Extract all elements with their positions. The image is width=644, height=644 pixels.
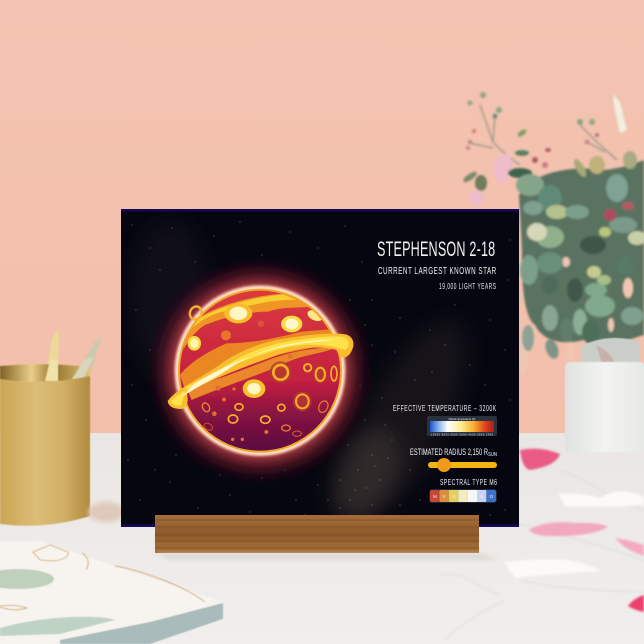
white flower [612, 93, 627, 133]
lower orange band [187, 347, 337, 400]
background: marble table [0, 433, 644, 644]
star illustration [145, 256, 375, 486]
pen gold [45, 329, 59, 381]
poster edge tint [121, 209, 519, 527]
star glow [145, 256, 375, 486]
craters [201, 364, 337, 436]
panel: star poster [121, 209, 519, 536]
plant leaves [508, 151, 644, 360]
estimated radius label: SUN [488, 452, 497, 458]
pale pink blossoms [469, 153, 513, 206]
pen silver [72, 336, 102, 379]
temperature color bar: Planck temperature (K) [449, 417, 475, 421]
wooden stand [155, 515, 500, 560]
radius slider [428, 458, 497, 472]
effective temperature label: EFFECTIVE TEMPERATURE – 3200K [393, 405, 496, 413]
notebook [0, 541, 223, 644]
plant [462, 92, 644, 375]
hot spots [188, 303, 324, 398]
equatorial ring [168, 333, 353, 409]
temperature color bar [427, 416, 497, 436]
title: STEPHENSON 2-18 [377, 237, 495, 261]
spectral type chips: M K G F A B O [433, 494, 494, 499]
spectral type chips [429, 489, 497, 503]
distance: 19,000 LIGHT YEARS [439, 283, 496, 291]
temperature color bar: 10000 8000 6000 5000 4000 3000 2000 [431, 433, 494, 436]
background: pink wall [0, 0, 644, 433]
plant dark mass [519, 160, 644, 344]
nub ring top left [188, 305, 204, 321]
sphere [178, 288, 342, 453]
subtitle: CURRENT LARGEST KNOWN STAR [378, 264, 496, 276]
small spots [212, 354, 292, 441]
spectral type label: SPECTRAL TYPE M6 [440, 479, 497, 487]
plant stems [470, 95, 625, 350]
estimated radius label: ESTIMATED RADIUS 2,150 R [410, 447, 488, 457]
upper orange bands [183, 293, 312, 350]
star field [128, 222, 510, 515]
pink and white petals [504, 449, 644, 612]
star rim glow [175, 285, 345, 456]
crater shadows [270, 361, 327, 411]
pencil cup [0, 329, 124, 526]
white vase [565, 338, 644, 452]
milky way haze [138, 230, 467, 515]
pink gaps [518, 257, 633, 375]
plant buds and sprigs [462, 92, 599, 191]
